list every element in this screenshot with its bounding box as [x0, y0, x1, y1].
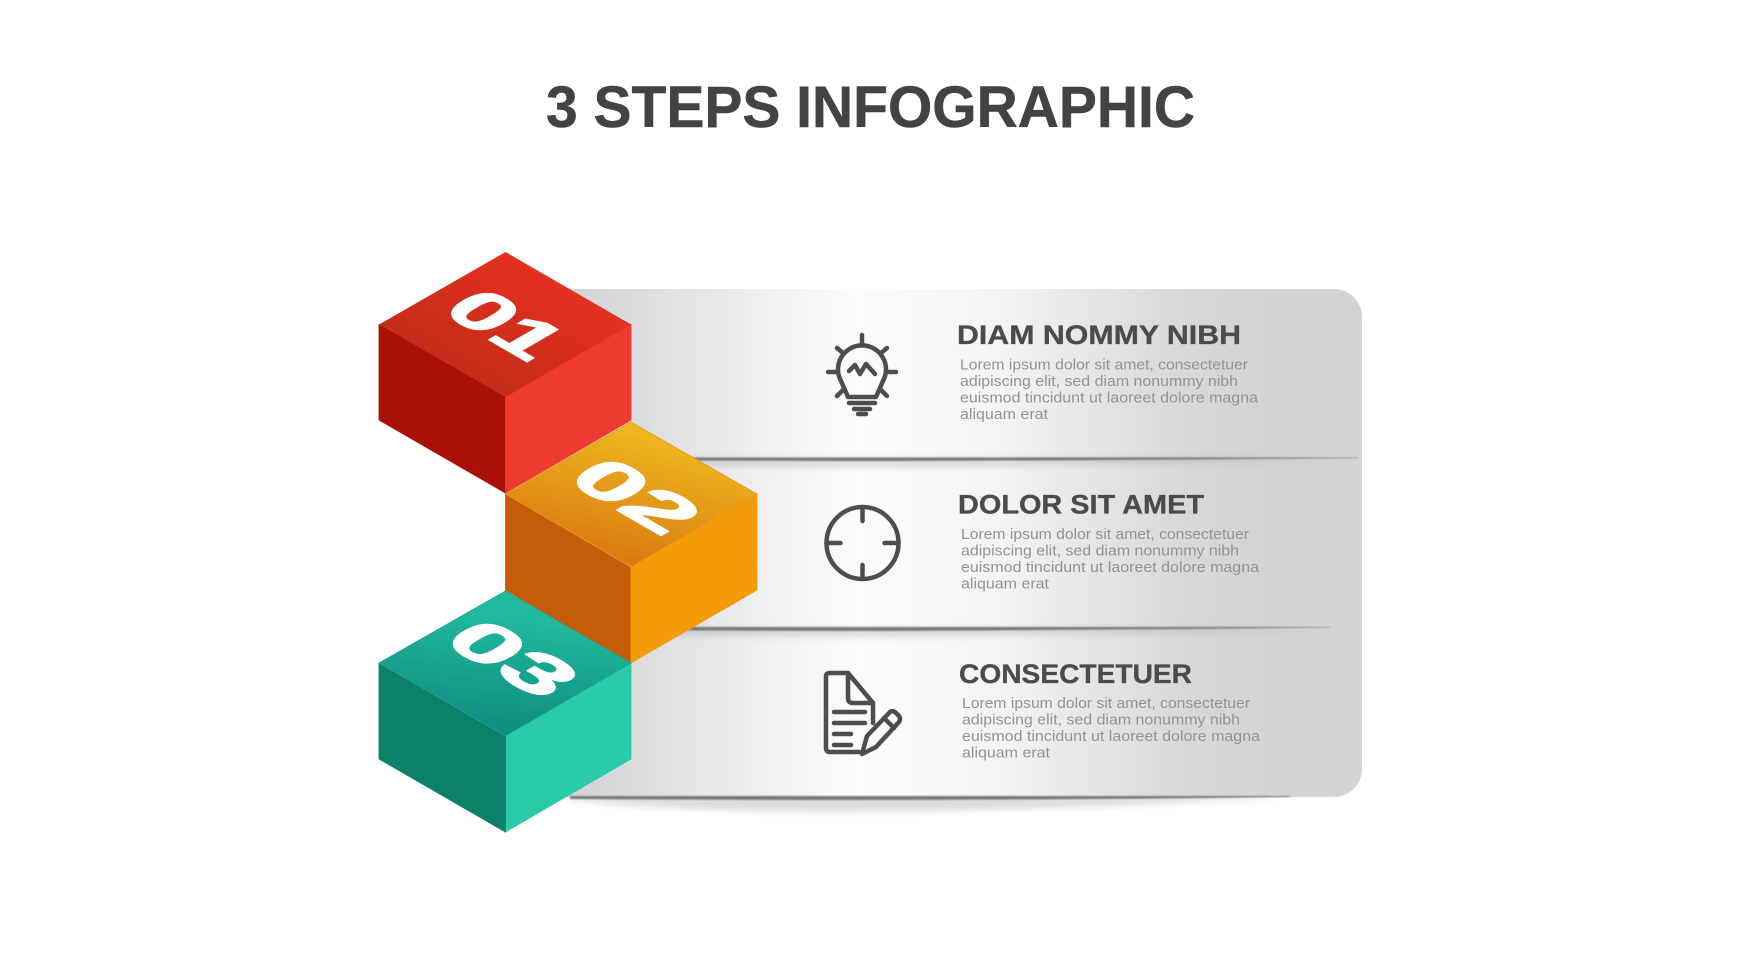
- text block 1: aliquam erat: [960, 406, 1049, 423]
- icon: target crosshair: [826, 507, 898, 579]
- icon: light bulb: [828, 335, 896, 414]
- bottom drop shadow: [570, 797, 1290, 811]
- text block 2: euismod tincidunt ut laoreet dolore magna: [961, 559, 1260, 576]
- number 01: 01: [426, 279, 585, 371]
- cube 02 orange: [506, 422, 757, 663]
- text block 2: Lorem ipsum dolor sit amet, consectetuer: [961, 526, 1249, 543]
- text block 3: aliquam erat: [962, 744, 1051, 762]
- heading: diam nommy nibh: DIAM NOMMY NIBH: [957, 320, 1241, 350]
- number 03: 03: [427, 609, 598, 709]
- band edge 1: [630, 458, 1358, 461]
- text block 3: Lorem ipsum dolor sit amet, consectetuer: [962, 695, 1250, 712]
- text block 1: euismod tincidunt ut laoreet dolore magna: [960, 390, 1259, 406]
- cube 03 green: [379, 591, 631, 832]
- band shadow 2: [630, 629, 1330, 637]
- panel: grey background with three bands: [520, 289, 1362, 811]
- icon: document with pencil: [826, 673, 900, 754]
- panel body: [520, 289, 1362, 797]
- text block 3: euismod tincidunt ut laoreet dolore magna: [962, 728, 1261, 745]
- text block 2: adipiscing elit, sed diam nonummy nibh: [961, 542, 1239, 560]
- cube 01 red: [379, 252, 631, 493]
- heading: consectetuer: CONSECTETUER: [959, 659, 1192, 689]
- heading: dolor sit amet: DOLOR SIT AMET: [958, 490, 1205, 520]
- band edge 2: [630, 627, 1330, 631]
- text block 2: aliquam erat: [961, 576, 1050, 592]
- text block 1: adipiscing elit, sed diam nonummy nibh: [960, 373, 1238, 390]
- text block 1: Lorem ipsum dolor sit amet, consectetuer: [960, 356, 1248, 374]
- text block 3: adipiscing elit, sed diam nonummy nibh: [962, 712, 1240, 728]
- band edge 3: [570, 796, 1290, 800]
- title: 3 STEPS INFOGRAPHIC: [546, 75, 1195, 140]
- band shadow 1: [630, 459, 1360, 467]
- number 02: 02: [551, 448, 720, 545]
